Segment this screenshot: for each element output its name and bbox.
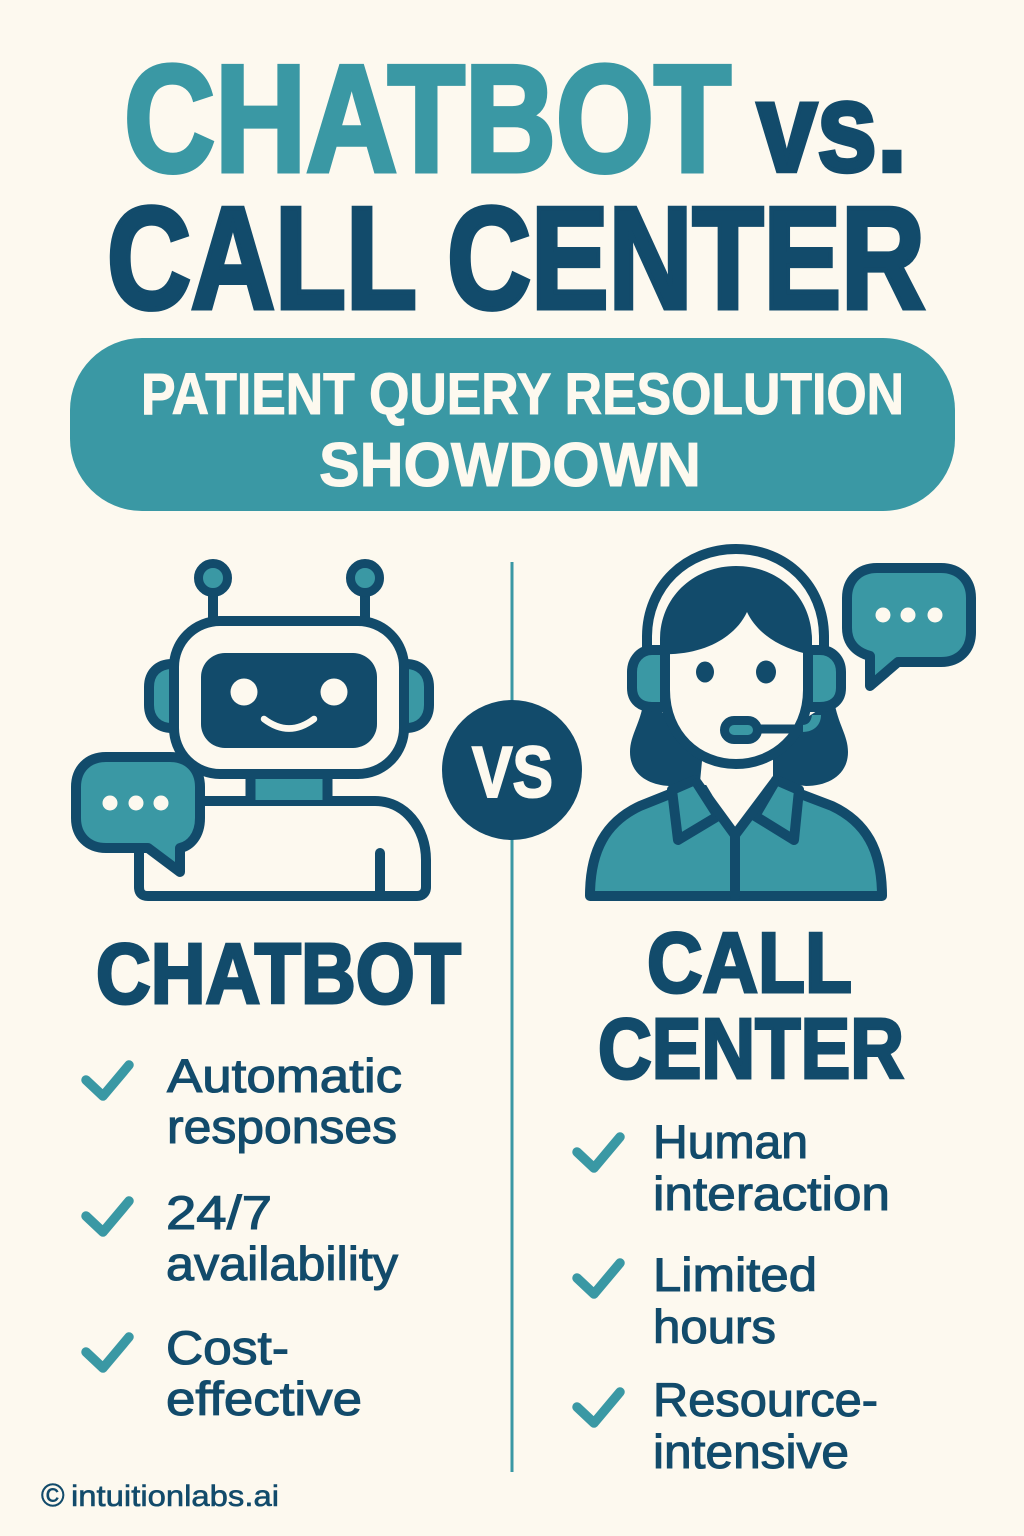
robot speech bubble <box>76 757 200 872</box>
subtitle banner: PATIENT QUERY RESOLUTION <box>141 362 904 427</box>
item: cost-effective <box>86 1321 362 1425</box>
subtitle banner <box>70 338 955 511</box>
agent microphone <box>724 715 821 740</box>
robot arm line <box>375 853 385 896</box>
vs badge: VS <box>472 733 553 813</box>
footer credit: intuitionlabs.ai <box>71 1480 279 1513</box>
heading: call center <box>598 916 904 1097</box>
footer credit: © <box>41 1477 65 1513</box>
agent face <box>665 610 808 764</box>
item: cost-effective: effective <box>166 1372 362 1425</box>
heading: call center: CALL <box>647 916 852 1011</box>
agent body <box>590 790 882 896</box>
robot antennas <box>198 564 380 622</box>
heading: call center: CENTER <box>598 1002 904 1097</box>
item: limited hours: Limited <box>653 1248 817 1301</box>
item: limited hours: hours <box>653 1300 776 1353</box>
item: 24/7 availability <box>86 1186 399 1290</box>
item: human interaction: Human <box>653 1115 808 1168</box>
center divider <box>510 562 514 1472</box>
robot head <box>174 621 404 774</box>
agent v-neck <box>697 783 774 896</box>
item: human interaction: interaction <box>653 1167 890 1220</box>
item: limited hours <box>577 1248 817 1353</box>
item: human interaction <box>577 1115 890 1220</box>
agent headband <box>647 549 824 650</box>
vs badge <box>442 700 582 840</box>
agent neck <box>702 755 773 833</box>
agent hair <box>660 566 812 655</box>
item: resource-intensive: Resource- <box>653 1373 878 1426</box>
agent speech bubble <box>847 568 971 686</box>
item: automatic responses: Automatic <box>167 1049 402 1102</box>
subtitle banner: SHOWDOWN <box>319 431 701 500</box>
agent headset ear cups <box>632 650 841 707</box>
call center list <box>577 1115 890 1478</box>
agent eyes <box>696 660 776 684</box>
title <box>107 34 925 339</box>
icon: call center agent <box>590 549 882 896</box>
agent collar <box>672 780 799 840</box>
item: cost-effective: Cost- <box>166 1321 289 1374</box>
item: automatic responses: responses <box>167 1100 397 1153</box>
robot ears <box>149 664 429 728</box>
chatbot list <box>86 1049 402 1425</box>
robot body <box>139 801 426 896</box>
title: CHATBOT <box>124 34 731 204</box>
item: resource-intensive: intensive <box>653 1425 849 1478</box>
item: automatic responses <box>86 1049 402 1153</box>
heading: chatbot: CHATBOT <box>96 927 461 1022</box>
agent lower hair <box>630 700 848 786</box>
item: resource-intensive <box>577 1373 878 1478</box>
robot neck <box>250 776 328 800</box>
icon: robot <box>76 564 429 896</box>
item: 24/7 availability: 24/7 <box>166 1186 272 1239</box>
title: vs. <box>757 56 907 198</box>
item: 24/7 availability: availability <box>166 1237 399 1290</box>
robot face screen <box>201 653 377 748</box>
